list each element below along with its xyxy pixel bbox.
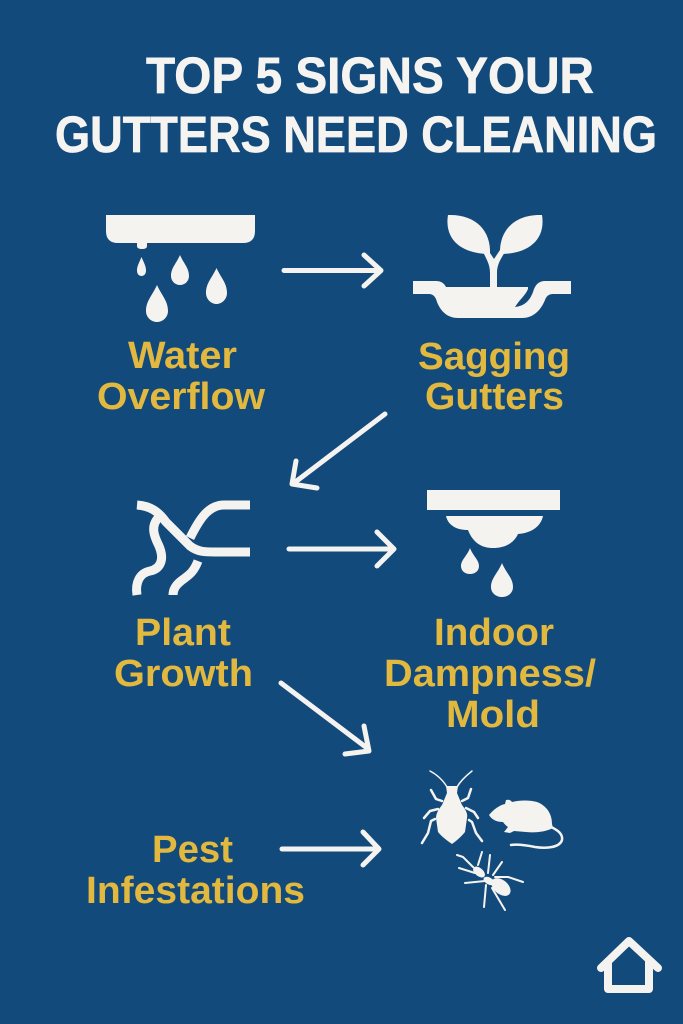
- icon: ant: [457, 852, 523, 910]
- title: TOP 5 SIGNS YOUR: [146, 47, 594, 104]
- title: [55, 47, 657, 163]
- label: sagging gutters: [418, 336, 570, 418]
- arrow: plant growth to indoor dampness: [289, 532, 394, 566]
- arrow: water overflow to sagging gutters: [284, 255, 381, 286]
- icon: sagging gutter with sprout: [413, 215, 571, 318]
- label: sagging gutters: Gutters: [425, 376, 564, 418]
- label: pest infestations: Pest: [152, 829, 233, 871]
- icon: plant growth roots: [137, 505, 250, 595]
- icon: rat: [489, 800, 562, 848]
- label: plant growth: Plant: [135, 612, 231, 654]
- label: plant growth: Growth: [114, 653, 253, 695]
- arrow: plant growth to pest infestations: [281, 683, 369, 754]
- label: water overflow: Overflow: [97, 376, 265, 418]
- label: water overflow: Water: [128, 335, 237, 377]
- label: indoor dampness / mold: [384, 612, 596, 736]
- arrow: pest infestations to pests: [282, 832, 379, 865]
- icon: water overflow: [106, 215, 255, 322]
- label: sagging gutters: Sagging: [418, 336, 570, 378]
- icon: house logo: [601, 941, 658, 989]
- icon: pests: [422, 771, 562, 910]
- icon: beetle: [422, 771, 482, 844]
- icon: indoor dampness ceiling: [427, 490, 560, 597]
- label: indoor dampness / mold: Dampness/: [384, 653, 596, 695]
- label: indoor dampness / mold: Indoor: [434, 612, 554, 654]
- label: water overflow: [97, 335, 265, 418]
- arrow: sagging gutters to plant growth: [292, 414, 385, 488]
- label: pest infestations: Infestations: [86, 870, 305, 912]
- label: plant growth: [114, 612, 253, 695]
- label: indoor dampness / mold: Mold: [446, 694, 540, 736]
- label: pest infestations: [86, 829, 305, 912]
